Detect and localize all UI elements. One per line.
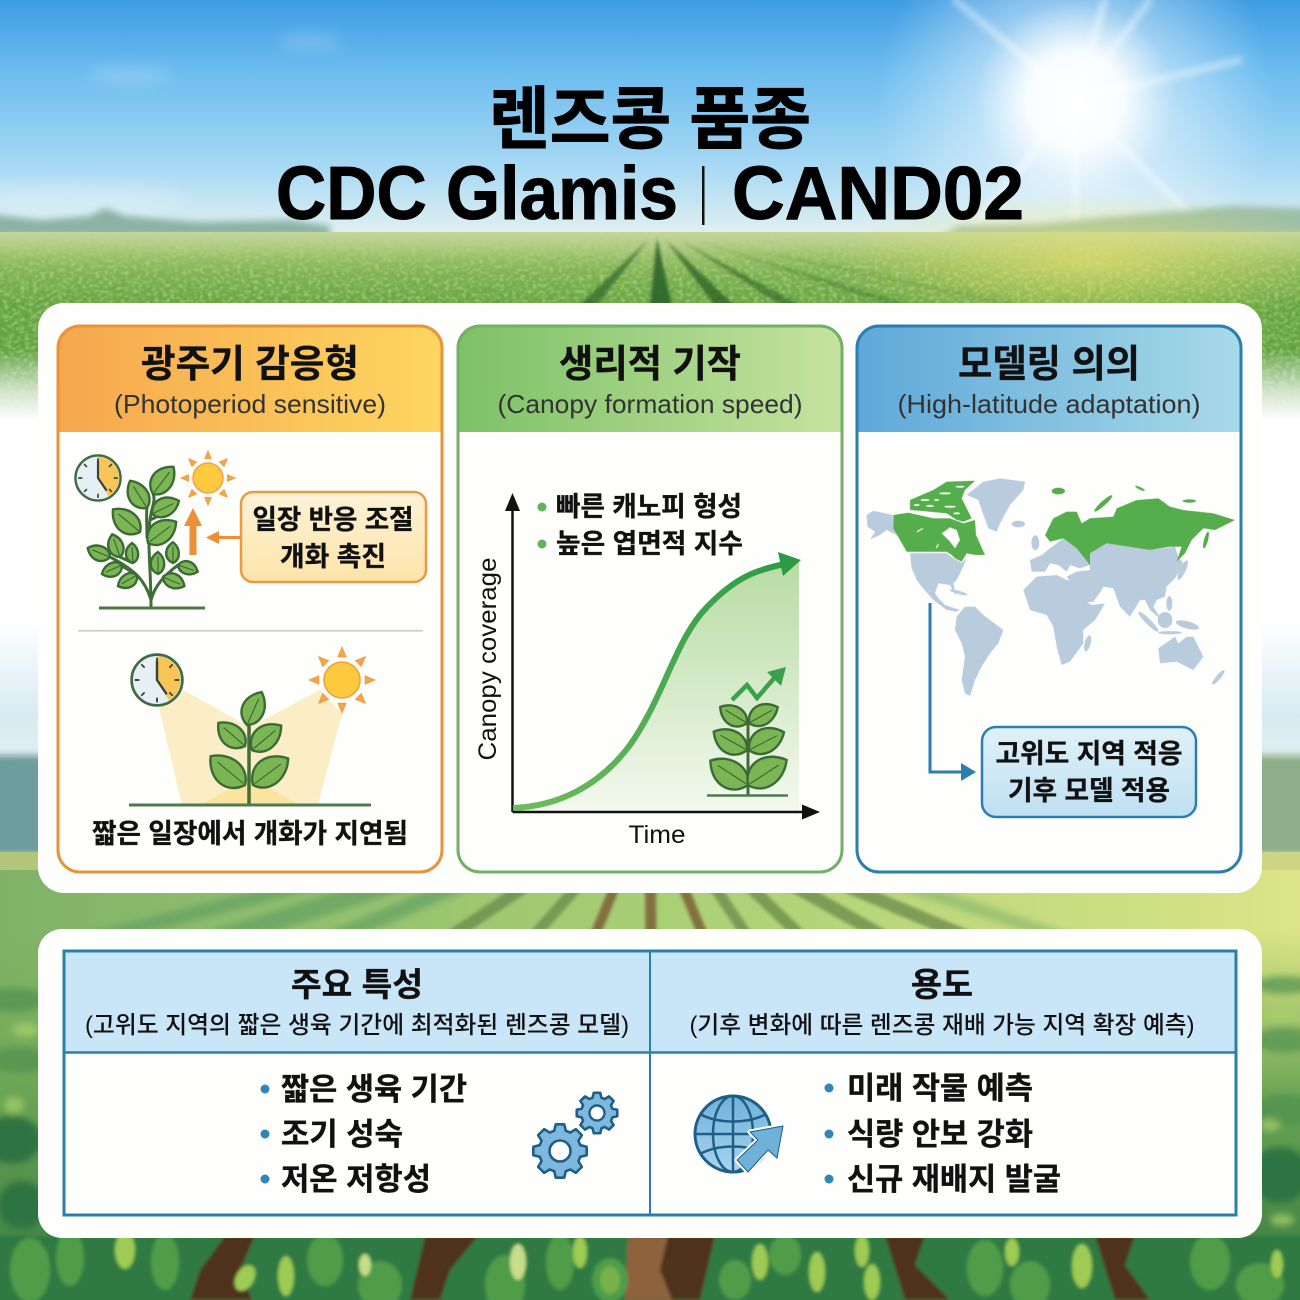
bullet notes: 빠른 캐노피 형성 <box>556 492 742 522</box>
callout: high-latitude application <box>982 727 1196 817</box>
panel border <box>58 326 442 872</box>
bright leaves <box>115 1231 1283 1300</box>
callout: high-latitude application: 고위도 지역 적응 <box>996 739 1182 769</box>
icon: growing plant <box>702 698 794 797</box>
title line 1: 렌즈콩 품종 <box>489 82 811 158</box>
bullet list: 짧은 생육 기간 <box>281 1072 467 1107</box>
field texture dark <box>0 236 1300 420</box>
arrow: map to callout <box>930 603 976 781</box>
arrow: up <box>184 508 202 555</box>
arrow: left <box>206 531 241 544</box>
icon: branching plant <box>85 460 205 608</box>
distant tree lines <box>0 206 1300 236</box>
callout: photoperiod response <box>241 492 426 582</box>
divider <box>78 630 423 632</box>
callout: photoperiod response: 개화 촉진 <box>280 542 386 572</box>
callout: high-latitude application: 기후 모델 적용 <box>1008 776 1170 806</box>
Hudson Bay and arctic channels <box>914 486 965 549</box>
line chart: canopy coverage over time <box>474 492 820 849</box>
main white panel <box>38 303 1262 893</box>
title <box>276 82 1024 235</box>
crop rows <box>578 238 1030 306</box>
x axis label: Time <box>628 821 686 849</box>
sky <box>0 0 1300 240</box>
subheading: (고위도 지역의 짧은 생육 기간에 최적화된 렌즈콩 모델) <box>85 1012 629 1039</box>
icon: sun <box>180 450 236 506</box>
y axis label: Canopy coverage <box>474 557 502 761</box>
bullet list: 식량 안보 강화 <box>847 1117 1033 1152</box>
lower field <box>0 852 1300 1300</box>
bottom white panel <box>38 929 1262 1238</box>
title line 2 right: CAND02 <box>732 151 1024 235</box>
field texture light <box>0 236 1300 420</box>
sunlit field <box>830 192 1300 332</box>
foreground foliage and soil <box>0 1230 1300 1300</box>
table header background <box>64 951 1236 1052</box>
title separator <box>702 166 704 225</box>
bullet notes: 높은 엽면적 지수 <box>556 529 743 559</box>
column: uses <box>690 966 1194 1197</box>
panel: photoperiod sensitive <box>58 326 442 872</box>
caption: 짧은 일장에서 개화가 지연됨 <box>92 819 408 849</box>
bullet list: 조기 성숙 <box>281 1117 403 1152</box>
growth curve <box>513 564 785 808</box>
bullet list: 저온 저항성 <box>281 1162 431 1197</box>
title line 2 left: CDC Glamis <box>276 151 678 235</box>
icon: short-day plant <box>201 687 296 805</box>
panel: canopy formation speed <box>458 326 842 872</box>
bullet list <box>260 1072 467 1197</box>
column: key characteristics <box>85 966 629 1197</box>
world map <box>867 478 1235 696</box>
icon: clock <box>132 655 182 705</box>
field fade <box>0 350 1300 420</box>
header background <box>858 326 1241 432</box>
area under curve <box>513 560 799 812</box>
foliage base <box>0 1236 1300 1300</box>
arrow: zigzag growth <box>732 667 786 700</box>
side margin foliage <box>0 976 1300 1229</box>
icon: clock <box>75 455 121 501</box>
axes <box>512 508 806 812</box>
heading: 생리적 기작 <box>559 344 741 386</box>
icon: globe with arrow <box>695 1096 783 1172</box>
panel border <box>857 326 1241 872</box>
grey continents <box>867 478 1226 696</box>
icon: gears <box>533 1093 617 1178</box>
subheading: (기후 변화에 따른 렌즈콩 재배 가능 지역 확장 예측) <box>690 1012 1194 1039</box>
highlighted Russia <box>1045 485 1235 565</box>
ground line <box>129 804 371 806</box>
heading: 모델링 의의 <box>958 344 1140 386</box>
heading: 광주기 감응형 <box>141 344 359 386</box>
bullet list: 신규 재배지 발굴 <box>847 1162 1061 1197</box>
lower field rows <box>445 850 975 940</box>
field <box>0 232 1300 422</box>
clouds <box>0 35 342 218</box>
bullet list <box>824 1071 1061 1197</box>
panel border <box>458 326 842 872</box>
sun glow <box>875 0 1275 300</box>
subheading: (Photoperiod sensitive) <box>114 389 386 419</box>
icon: sun <box>309 647 375 713</box>
fog band <box>0 418 1300 756</box>
horizon haze <box>0 232 1300 274</box>
highlighted Canada <box>893 481 985 562</box>
heading: 주요 특성 <box>291 966 423 1003</box>
heading: 용도 <box>911 966 973 1003</box>
panel: high-latitude adaptation <box>857 326 1241 872</box>
subheading: (Canopy formation speed) <box>498 389 802 419</box>
bullet list: 미래 작물 예측 <box>847 1071 1033 1106</box>
callout: photoperiod response: 일장 반응 조절 <box>252 505 414 535</box>
table frame <box>64 951 1236 1215</box>
light beams <box>159 690 342 805</box>
mid-green leaves <box>10 1230 1284 1300</box>
soil columns <box>190 1236 1150 1300</box>
header background <box>58 326 442 432</box>
header background <box>458 326 842 432</box>
subheading: (High-latitude adaptation) <box>898 389 1200 419</box>
bullet notes <box>538 492 743 559</box>
far trees <box>0 755 1300 855</box>
